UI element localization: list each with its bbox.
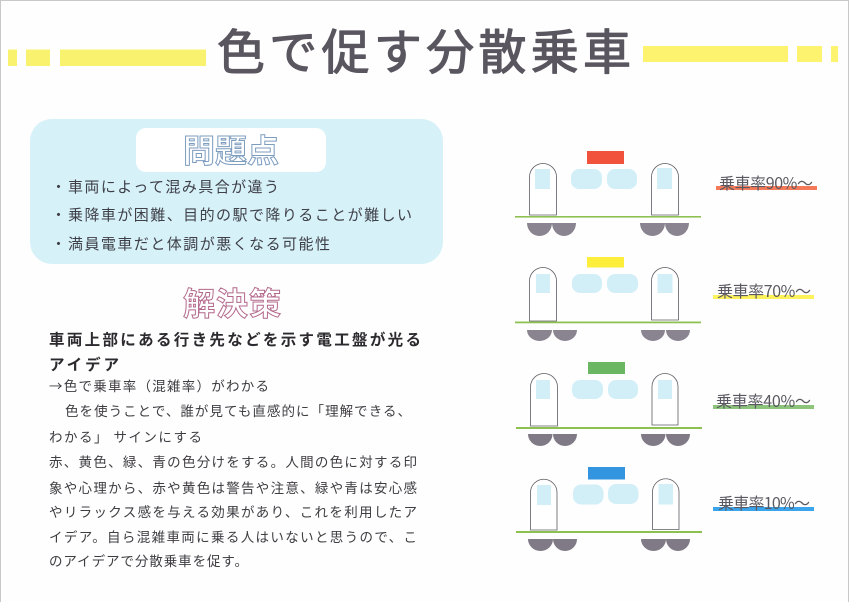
solution body text [49,375,418,570]
label: 70%: 乗車率70%～ [717,278,811,302]
problem list: 車両によって混み具合が違う [68,176,279,197]
train: red sign [515,151,701,236]
label: 40%: 乗車率40%～ [716,388,811,412]
problem list: 満員電車だと体調が悪くなる可能性 [68,233,330,254]
train: blue sign [516,467,702,551]
solution headline [49,328,421,375]
train: green sign [516,362,702,446]
panel: problems [30,119,443,264]
solution body text: イデア。自ら混雑車両に乗る人はいないと思うので、こ [49,526,417,546]
problem list: ・ [51,204,66,225]
solution body text: →色で乗車率（混雑率）がわかる [49,375,269,395]
solution body text: 象や心理から、赤や黄色は警告や注意、緑や青は安心感 [49,477,418,497]
solution headline: アイデア [49,353,119,375]
train: yellow sign [515,257,701,341]
heading box: problems: 問題点 [183,126,279,172]
label: 10%: 乗車率10%～ [718,490,810,514]
problem list [51,176,412,254]
solution body text: わかる」 サインにする [49,426,202,446]
heading box: problems [136,126,326,172]
right title bars [643,46,838,62]
left title bars [8,50,206,66]
label: 90%: 乗車率90%～ [719,170,813,194]
solution body text: のアイデアで分散乗車を促す。 [49,550,248,570]
problem list: ・ [51,233,66,254]
problem list: 乗降車が困難、目的の駅で降りることが難しい [68,204,412,225]
solution body text: 赤、黄色、緑、青の色分けをする。人間の色に対する印 [49,451,417,471]
title: 色で促す分散乗車 [217,13,631,83]
solution headline: 車両上部にある行き先などを示す電工盤が光る [49,328,421,350]
problem list: ・ [51,176,66,197]
solution body text: 色を使うことで、誰が見ても直感的に「理解できる、 [65,400,411,420]
heading: solution: 解決策 [183,279,281,325]
solution body text: やリラックス感を与える効果があり、これを利用したア [49,501,417,521]
